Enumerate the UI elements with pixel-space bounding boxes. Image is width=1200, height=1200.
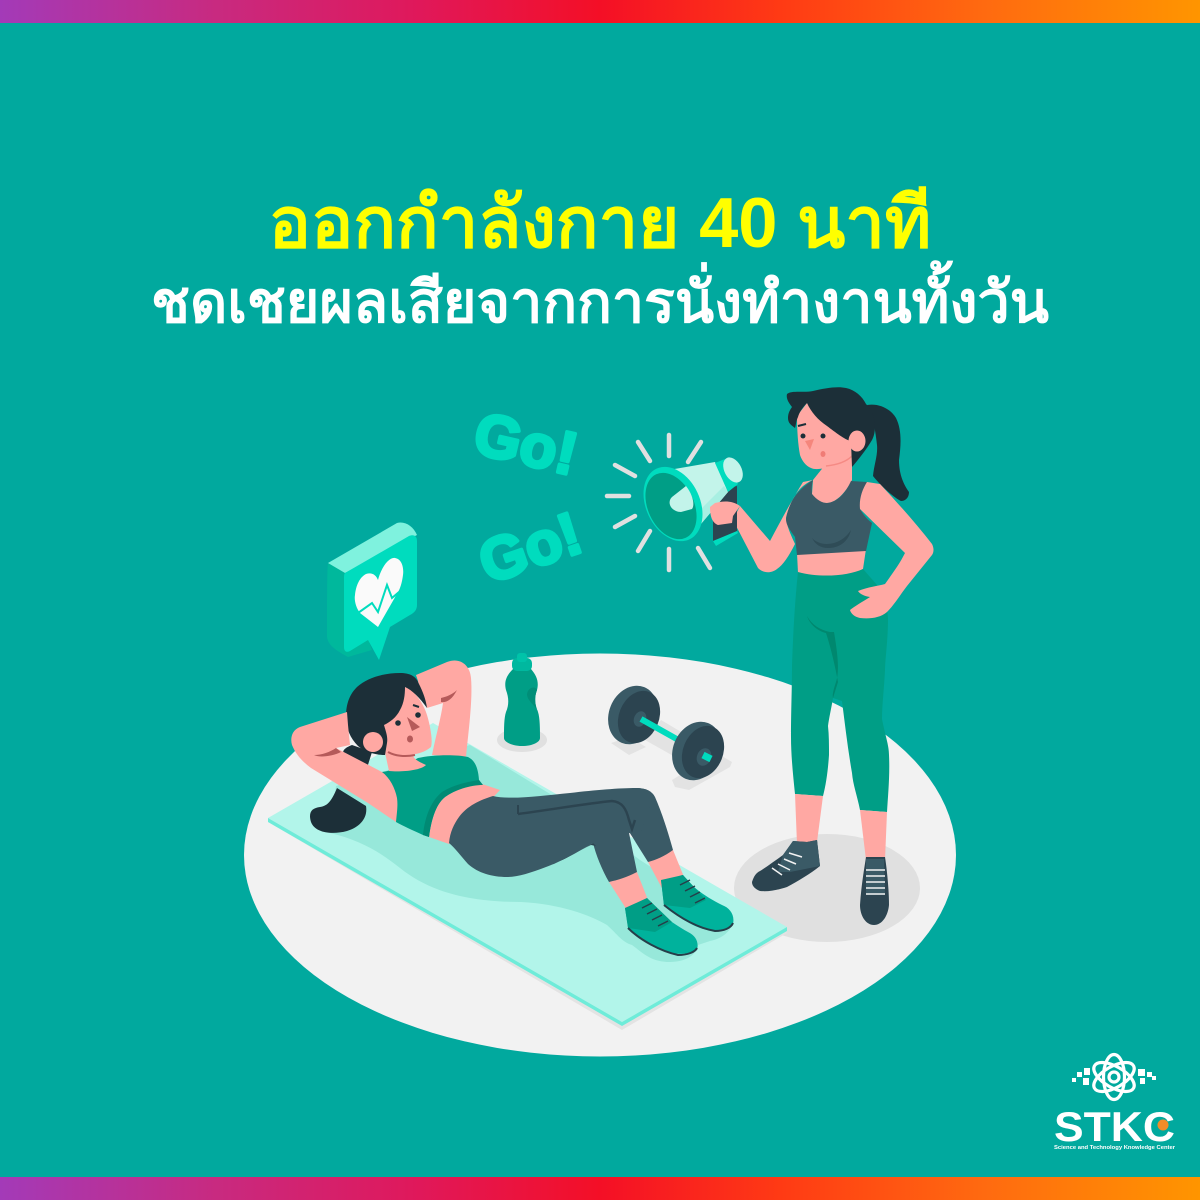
woman lying down doing sit-ups — [291, 660, 733, 955]
left shoe — [752, 840, 820, 891]
bent arm on hip — [850, 482, 934, 618]
icon: pulse line — [358, 585, 399, 613]
standing shadow — [734, 834, 920, 942]
leggings hips and near leg — [449, 788, 653, 882]
ponytail — [310, 745, 372, 833]
far shoe — [661, 875, 733, 931]
logo tagline: Science and Technology Knowledge Center — [1054, 1145, 1176, 1151]
icon: heart — [355, 558, 403, 627]
logo wordmark: STKC — [1054, 1103, 1175, 1150]
face — [378, 687, 432, 755]
ponytail — [867, 405, 909, 501]
far leg leggings — [612, 788, 673, 862]
bottle — [497, 653, 547, 752]
bra top — [786, 480, 872, 555]
go text lower: Go! — [470, 499, 590, 596]
atom icon — [1089, 1054, 1139, 1100]
crop top — [382, 755, 482, 837]
right shoe — [860, 857, 889, 925]
STKC logo — [1054, 1054, 1176, 1151]
neck — [384, 746, 426, 771]
hand on handle — [710, 501, 740, 525]
hair — [346, 673, 427, 755]
dumbbell — [600, 678, 732, 790]
midriff — [797, 549, 866, 577]
midriff — [429, 784, 500, 844]
ear — [363, 732, 383, 752]
megaphone rays — [607, 435, 710, 570]
data squares — [1072, 1068, 1156, 1085]
title: ออกกำลังกาย 40 นาที — [269, 183, 931, 262]
neck and chest — [812, 458, 852, 503]
hair — [787, 387, 875, 467]
shins — [795, 794, 823, 844]
megaphone — [632, 454, 747, 551]
top gradient bar — [0, 0, 1200, 23]
standing woman with megaphone — [632, 387, 934, 925]
near arm behind head — [291, 712, 397, 822]
far arm — [733, 480, 813, 572]
yoga mat — [268, 723, 787, 1030]
far shin — [648, 850, 684, 892]
near shoe — [625, 898, 698, 955]
ground ellipse — [244, 654, 956, 1056]
near shin — [609, 872, 654, 915]
leggings — [791, 569, 889, 812]
heart rate speech bubble — [327, 523, 417, 660]
face — [797, 403, 852, 469]
subtitle: ชดเชยผลเสียจากการนั่งทำงานทั้งวัน — [151, 271, 1049, 335]
go text upper: Go! — [468, 399, 584, 488]
bottom gradient bar — [0, 1177, 1200, 1200]
logo orange dot — [1158, 1120, 1168, 1130]
far arm behind head — [416, 660, 471, 757]
ear — [848, 430, 866, 452]
